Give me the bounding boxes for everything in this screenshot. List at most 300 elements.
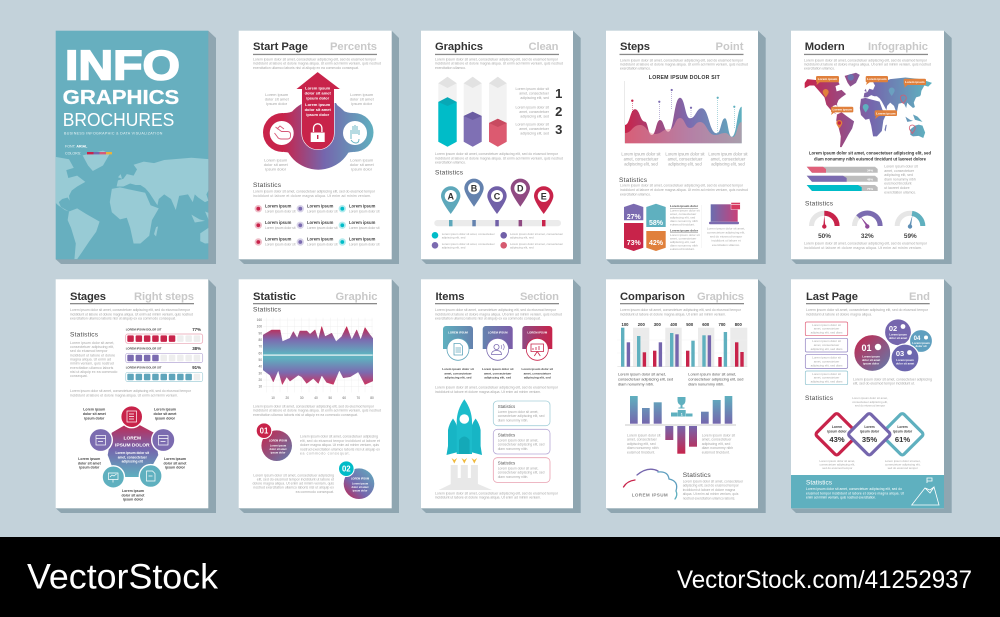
chart captions <box>618 372 743 386</box>
heading <box>620 291 744 304</box>
statistics text: exercitation ullamco laboris <box>70 366 114 370</box>
statistics text: incididunt ut labore et dolore magna aliqua. Ut enim ad minim veniam, quis nostrud <box>620 188 748 192</box>
panel: statistic page <box>239 279 399 513</box>
closing text: Lorem ipsum dolor sit amet, consectetuer adipiscing elit, sed do eiusmod tempor <box>804 242 928 246</box>
icon: trophy podium: 1 <box>681 412 683 416</box>
diamond captions: sed do eiusmod tempor <box>822 466 852 470</box>
closing text <box>435 492 559 500</box>
bold caption <box>809 150 931 161</box>
cloud logo: LOREM IPSUM <box>632 492 668 498</box>
icon: pointing hand <box>270 121 294 145</box>
intro text: Lorem ipsum dolor sit amet, consectetuer adipiscing elit, sed do eiusmod tempor <box>253 58 377 62</box>
intro text <box>804 58 931 71</box>
bars notes: Lorem ipsum dolor sit <box>884 164 918 168</box>
card: person speaking <box>483 326 513 360</box>
cover title: BROCHURES <box>63 109 174 130</box>
watermark url: VectorStock.com/41252937 <box>677 567 972 594</box>
progress bars: 77% <box>192 327 201 332</box>
location pins: E <box>541 191 547 201</box>
chart captions: consectetuer adipiscing elit, sed <box>688 376 743 382</box>
intro text: Lorem ipsum dolor sit amet, consectetuer adipiscing elit, sed do eiusmod tempor <box>620 58 744 62</box>
cover title: INFO <box>65 42 180 88</box>
intro text: incididunt ut labore et dolore magna aliqua. Ut enim ad minim veniam, quis nostrud <box>620 62 748 66</box>
mirrored area chart: 50 <box>258 358 262 362</box>
statistic dots grid: Lorem ipsum <box>307 220 334 225</box>
statistics heading: Statistics <box>435 170 464 176</box>
statistics text: minim veniam, quis nostrud <box>70 362 114 366</box>
legend: adipiscing elit, sed <box>510 246 534 250</box>
statistic dots grid: Lorem ipsum dolor sit <box>349 243 380 247</box>
card captions: Lorem ipsum dolor sit <box>482 367 513 371</box>
grouped bar chart: 500 <box>686 322 694 327</box>
statistic dots grid: Lorem ipsum dolor sit <box>307 209 338 213</box>
panel: items page <box>421 279 581 513</box>
statistics note: sed do eiusmod tempor <box>855 404 885 408</box>
statistics box 3: Statistics <box>498 461 516 466</box>
statistics text: nisi ut aliquip ex ea commodo <box>70 370 117 374</box>
percent hex blocks: 58% <box>649 220 664 227</box>
statistics text: Lorem ipsum dolor sit amet, <box>70 341 114 345</box>
statistic dots grid: Lorem ipsum <box>349 237 376 242</box>
statistic dots grid: Lorem ipsum dolor sit <box>265 243 296 247</box>
statistics box 3: consectetuer adipiscing elit, sed <box>498 471 545 475</box>
teal footer band: Lorem ipsum dolor sit amet, consectetuer adipiscing elit, sed do <box>806 487 902 491</box>
diverging text: amet, consectetuer <box>702 438 732 442</box>
outlined text boxes: amet, consectetuer <box>814 327 839 331</box>
statistics text: exercitation ullamco. <box>620 192 651 196</box>
bars notes: diam nonummy nibh <box>884 177 916 181</box>
chart caption: exercitation ullamco laboris nisi ut aliquip ex ea commodo consequat. <box>253 413 358 417</box>
mirrored area chart: 10 <box>271 396 275 400</box>
circle 02: 02 <box>342 465 351 474</box>
block notes: Lorem ipsum dolor <box>670 204 699 208</box>
side labels: Lorem ipsum <box>350 158 374 162</box>
mirrored area chart: 40 <box>314 396 318 400</box>
blob diagram <box>263 100 374 170</box>
diamond stats: ipsum dolor <box>893 430 913 434</box>
card: document <box>443 326 473 360</box>
legend: Lorem ipsum dolor sit amet, consectetuer <box>442 232 495 236</box>
map callouts: Lorem ipsum <box>867 77 887 81</box>
statistics text: magna aliqua. Ut enim ad <box>70 358 111 362</box>
heading: Infographic <box>868 41 928 53</box>
cover world map <box>56 150 208 259</box>
heading <box>804 41 928 55</box>
diverging text: euismod tincidunt. <box>627 450 655 454</box>
mirrored area chart: 60 <box>343 396 346 400</box>
diverging text: diam nonummy nibh <box>627 446 659 450</box>
circle 02 text <box>252 474 334 494</box>
bars notes: exercitation ullamco. <box>884 190 916 194</box>
diamond stats: Lorem <box>832 425 842 429</box>
numbered circles <box>854 319 932 372</box>
circles caption <box>853 378 932 386</box>
intro text <box>620 58 748 71</box>
legend: Lorem ipsum dolor sit amet, consectetuer <box>510 232 563 236</box>
icon: trophy podium <box>671 397 692 416</box>
chart captions: diam nonummy nibh. <box>688 381 724 386</box>
progress bars: 38% <box>192 346 201 351</box>
statistics heading: Statistics <box>253 182 282 189</box>
side labels: dolor sit amet <box>264 162 289 167</box>
diverging text: diam nonummy nibh <box>702 446 733 450</box>
stage labels: dolor sit amet <box>154 412 177 416</box>
card captions: amet, consectetuer <box>444 371 472 375</box>
mid text: Lorem ipsum dolor sit amet, consectetuer adipiscing elit, sed do eiusmod tempor <box>435 386 559 390</box>
3d bars: 48% <box>867 178 873 182</box>
icon: open hand <box>343 121 367 145</box>
grouped bar chart: 400 <box>670 322 678 327</box>
side labels: ipsum dolor <box>265 166 287 172</box>
stage labels: ipsum dolor <box>165 466 186 470</box>
circle 01 text <box>300 434 380 456</box>
statistic dots grid: Lorem ipsum dolor sit <box>265 226 296 230</box>
card captions: amet, consectetuer <box>484 371 512 375</box>
mirrored area chart: 70 <box>258 345 262 349</box>
diverging text: amet, consectetuer <box>627 438 658 442</box>
statistics text: Lorem ipsum dolor sit amet, consectetuer <box>683 480 744 484</box>
cloud logo <box>624 469 677 499</box>
statistics text: adipiscing elit, sed do eiusmod tempor <box>683 484 740 488</box>
circle 02 text: Lorem ipsum dolor sit amet, consectetuer adipiscing <box>253 474 334 478</box>
grouped bar chart: 800 <box>735 322 742 327</box>
location pins: A <box>447 191 454 201</box>
numbered circles: 02 <box>889 324 897 333</box>
numbered notes <box>516 86 562 137</box>
three captions: amet, consectetuer <box>624 156 659 162</box>
statistics text: consectetuer adipiscing elit, <box>70 345 114 349</box>
block notes <box>670 204 700 251</box>
block notes: Lorem ipsum dolor sit <box>670 233 700 237</box>
world map <box>805 73 932 147</box>
card: presentation <box>522 326 552 360</box>
statistics text <box>253 190 376 198</box>
statistic dots grid: Lorem ipsum <box>265 204 292 208</box>
intro text: exercitation ullamco laboris nisi ut aliquip ex ea commodo consequat. <box>435 317 541 321</box>
intro text <box>806 308 929 316</box>
heading: Statistic <box>253 291 296 303</box>
cover title: GRAPHICS <box>63 86 179 109</box>
cover title <box>63 42 180 130</box>
outlined text boxes: amet, consectetuer <box>814 359 839 363</box>
intro text: exercitation ullamco. <box>620 67 651 71</box>
statistic dots grid: Lorem ipsum <box>349 204 376 208</box>
statistics heading: Statistics <box>619 177 648 184</box>
heading <box>253 41 377 55</box>
grouped bar chart: 700 <box>718 322 726 327</box>
circle 01: dolor sit amet <box>269 447 287 451</box>
outlined text boxes: adipiscing elit, sed diam <box>811 380 843 384</box>
heading: Clean <box>528 41 559 53</box>
numbered circles: dolor sit amet <box>862 358 880 362</box>
laptop caption: Lorem ipsum dolor sit amet, <box>707 226 745 230</box>
block notes: amet, consectetuer <box>670 212 696 216</box>
progress bars: 91% <box>192 365 201 370</box>
numbered circles: ipsum dolor <box>863 362 880 366</box>
pentagon diagram: LOREM <box>123 436 141 442</box>
intro text: exercitation ullamco. <box>804 67 835 71</box>
statistics heading: Statistics <box>805 200 834 208</box>
card captions: adipiscing elit, sed <box>445 376 472 380</box>
statistics note: Lorem ipsum dolor sit amet, <box>852 396 888 400</box>
diverging bars <box>625 396 736 454</box>
circle 02 <box>338 461 374 499</box>
diverging text: euismod tincidunt. <box>702 450 730 454</box>
stage labels: Lorem ipsum <box>83 408 105 412</box>
three captions <box>621 152 748 166</box>
intro text: exercitation ullamco laboris nisi ut aliquip ex ea commodo consequat. <box>253 66 359 70</box>
statistics text: consequat. <box>70 374 88 378</box>
heading <box>806 291 930 304</box>
diverging text: adipiscing elit, sed <box>627 442 656 446</box>
block notes: Lorem ipsum dolor <box>670 228 699 232</box>
pentagon diagram <box>89 406 175 488</box>
numbered notes: adipiscing elit, sed <box>520 96 549 100</box>
percent hex blocks <box>624 204 666 251</box>
statistics note: consectetuer adipiscing elit, <box>852 400 888 404</box>
gauge percentages: 32% <box>861 233 874 240</box>
diverging text: Lorem ipsum dolor sit <box>627 434 660 438</box>
circles caption: Lorem ipsum dolor sit amet, consectetuer adipiscing <box>853 378 932 382</box>
percent hex blocks: 42% <box>649 240 664 247</box>
card: document: LOREM IPSUM <box>448 330 469 334</box>
mirrored area chart: 160 <box>257 318 262 322</box>
diamond stats <box>815 413 924 456</box>
gauge percentages <box>818 233 917 240</box>
heading: Start Page <box>253 41 308 53</box>
card captions: amet, consectetuer <box>524 371 552 375</box>
bold caption: diam nonummy nibh euismod tincidunt ut laoreet dolore <box>814 156 927 161</box>
heading: Right steps <box>134 291 194 303</box>
mid text: incididunt ut labore et dolore magna aliqua. Ut enim ad minim veniam. <box>435 390 541 394</box>
statistic dots grid: Lorem ipsum <box>265 237 292 242</box>
statistic dots grid: Lorem ipsum <box>307 237 334 242</box>
circle 01: 01 <box>260 427 269 436</box>
diamond captions: Lorem ipsum dolor sit amet, <box>885 459 921 463</box>
circle 02 text: ea commodo consequat. <box>296 490 334 494</box>
pentagon diagram: amet, consectetuer <box>118 455 148 459</box>
statistics text: incididunt ut labore et dolore magna <box>683 488 735 492</box>
laptop caption <box>707 226 745 247</box>
block notes: Lorem ipsum dolor sit <box>670 208 700 212</box>
outlined text boxes: amet, consectetuer <box>814 343 839 347</box>
side labels: Lorem ipsum <box>265 92 289 97</box>
intro text: incididunt ut labore et dolore magna aliqua. Ut enim ad minim veniam, quis nostrud <box>804 62 931 66</box>
outlined text boxes <box>805 322 848 385</box>
location pins: B <box>471 184 478 194</box>
stage circles <box>89 406 175 488</box>
map pins <box>823 74 915 134</box>
intro text: Lorem ipsum dolor sit amet, consectetuer adipiscing elit, sed do eiusmod tempor <box>70 308 191 312</box>
circle 01: Lorem ipsum <box>270 444 287 448</box>
teal footer band: eiusmod tempor incididunt ut labore et dolore magna aliqua. Ut <box>806 491 904 495</box>
mirrored area chart: 60 <box>258 351 262 355</box>
teal footer band: enim ad minim veniam, quis nostrud exercitation. <box>806 496 876 500</box>
panel: graphics page <box>421 31 581 264</box>
diamond captions: sed do eiusmod tempor <box>888 466 918 470</box>
heading <box>435 41 559 55</box>
progress bars: LOREM IPSUM DOLOR SIT <box>126 366 162 370</box>
heading: Point <box>716 41 744 53</box>
mirrored area chart: 100 <box>257 325 262 329</box>
statistics text: aliqua. Ut enim ad minim veniam, quis <box>683 492 739 496</box>
heading: End <box>909 291 930 303</box>
circle 02: dolor sit amet <box>351 485 369 489</box>
laptop caption: sed do eiusmod tempor <box>710 234 742 238</box>
statistics box 1 <box>493 401 550 426</box>
side labels: ipsum dolor <box>351 166 373 172</box>
heading: Steps <box>620 41 650 53</box>
heading: Comparison <box>620 291 685 303</box>
outlined text boxes: Lorem ipsum dolor sit <box>812 356 841 360</box>
location pins <box>441 179 553 214</box>
heading: Section <box>520 291 559 303</box>
three captions: adipiscing elit, sed <box>668 162 702 166</box>
heading: Graphics <box>697 291 744 303</box>
stage labels: ipsum dolor <box>155 416 176 420</box>
statistic dots grid: Lorem ipsum dolor sit <box>307 226 338 230</box>
legend: adipiscing elit, sed <box>442 246 466 250</box>
chart captions: Lorem ipsum dolor sit amet, <box>688 372 736 376</box>
stage labels: ipsum dolor <box>84 416 105 420</box>
panel: stages page <box>56 279 216 513</box>
map callouts: Lorem ipsum <box>876 111 896 115</box>
grouped bar chart: 200 <box>638 322 645 327</box>
mirrored area chart: 30 <box>258 371 262 375</box>
area chart <box>624 75 742 143</box>
statistics heading: Statistics <box>70 332 99 338</box>
location pins: D <box>517 184 524 194</box>
block notes: adipiscing elit, sed <box>670 240 696 244</box>
up arrow <box>296 72 341 150</box>
card captions: adipiscing elit, sed <box>524 376 551 380</box>
stage labels: dolor sit amet <box>122 493 145 497</box>
laptop caption: incididunt ut labore et <box>711 238 741 242</box>
diamond captions <box>819 459 921 470</box>
cover colour swatches <box>65 152 112 156</box>
side labels: dolor sit amet <box>350 162 375 167</box>
three captions: amet, consectetuer <box>711 156 746 162</box>
gauge percentages: 59% <box>904 233 917 240</box>
heading: Graphic <box>336 291 378 303</box>
statistic dots grid <box>255 204 380 247</box>
block notes: diam nonummy nibh <box>670 219 698 223</box>
laptop caption: exercitation ullamco. <box>712 243 740 247</box>
icon: padlock <box>311 124 325 142</box>
numbered notes: amet, consectetuer <box>519 110 550 114</box>
intro text: Lorem ipsum dolor sit amet, consectetuer adipiscing elit, sed do eiusmod tempor <box>804 58 928 62</box>
mirrored area chart: 80 <box>258 338 262 342</box>
pentagon diagram: Lorem ipsum dolor sit <box>116 451 150 455</box>
closing text: Lorem ipsum dolor sit amet, consectetuer adipiscing elit, sed do eiusmod tempor <box>435 492 559 496</box>
footer bar <box>0 537 1000 617</box>
mid text: incididunt ut labore et dolore magna aliqua. Ut enim ad minim veniam. <box>70 393 178 397</box>
mirrored area chart: 20 <box>286 396 289 400</box>
heading <box>435 291 559 304</box>
panel: cover page <box>56 30 216 264</box>
chart captions: consectetuer adipiscing elit, sed <box>618 376 673 382</box>
statistics note <box>852 396 888 408</box>
progress bars: LOREM IPSUM DOLOR SIT <box>126 346 162 350</box>
statistics heading: Statistics <box>683 472 711 479</box>
statistics box 2 <box>493 429 550 454</box>
mid text: exercitation ullamco. <box>435 160 466 164</box>
3d column chart <box>438 77 507 147</box>
statistics heading: Statistics <box>805 395 834 402</box>
grouped bar chart: 300 <box>654 322 661 327</box>
cover colour swatches: COLORS: <box>65 152 81 156</box>
bars notes: amet, consectetuer <box>884 169 915 173</box>
card captions <box>442 367 553 380</box>
block notes: euismod tincidunt. <box>670 222 695 226</box>
numbered circles: dolor sit amet <box>889 336 907 340</box>
intro text <box>620 308 742 316</box>
block notes: amet, consectetuer <box>670 236 696 240</box>
heading: Stages <box>70 291 106 303</box>
statistics text: incididunt ut labore et dolore magna aliqua. Ut enim ad minim veniam. <box>253 194 371 198</box>
diamond stats: 43% <box>829 435 845 444</box>
statistics box 2: Statistics <box>498 432 516 437</box>
numbered notes: 2 <box>555 104 562 119</box>
outlined text boxes: adipiscing elit, sed diam <box>811 347 843 351</box>
heading <box>70 291 194 304</box>
diamond stats: ipsum dolor <box>827 430 847 434</box>
mid text: Lorem ipsum dolor sit amet, consectetuer adipiscing elit, sed do eiusmod tempor <box>70 389 192 393</box>
statistics box 2: consectetuer adipiscing elit, sed <box>498 442 545 446</box>
map callouts: Lorem ipsum <box>818 77 837 81</box>
diverging text <box>627 434 735 454</box>
intro text: incididunt ut labore et dolore magna aliqua. <box>806 312 872 316</box>
heading: Graphics <box>435 41 483 53</box>
numbered notes: amet, consectetuer <box>519 92 550 96</box>
up arrow: ipsum dolor <box>306 112 330 117</box>
stage labels: dolor sit amet <box>78 461 102 465</box>
intro text: Lorem ipsum dolor sit amet, consectetuer adipiscing elit, sed do eiusmod tempor <box>435 58 559 62</box>
panel: steps page <box>606 31 766 264</box>
chart caption: Lorem ipsum dolor sit amet, consectetuer adipiscing elit, sed do eiusmod tempor <box>253 404 375 408</box>
side labels <box>264 92 375 172</box>
card: person speaking: LOREM IPSUM <box>488 330 508 334</box>
numbered notes: 3 <box>555 122 562 137</box>
diamond stats: Lorem <box>897 425 908 429</box>
numbered notes: 1 <box>555 86 562 101</box>
circle 02: Lorem ipsum <box>352 482 369 486</box>
three captions: Lorem ipsum dolor sit <box>708 152 748 156</box>
mid text: incididunt ut labore et dolore magna aliqua. Ut enim ad minim veniam, quis nostrud <box>435 156 563 160</box>
progress bars <box>126 327 203 382</box>
numbered circles: 01 <box>861 343 872 353</box>
percent hex blocks: 27% <box>627 214 641 221</box>
circle 01: LOREM IPSUM <box>269 438 287 442</box>
side labels: ipsum dolor <box>266 101 288 106</box>
intro text <box>70 308 193 321</box>
intro text: incididunt ut labore et dolore magna aliqua. Ut enim ad minim veniam, quis nostrud <box>70 312 193 316</box>
legend <box>432 232 563 250</box>
map callouts: Lorem ipsum <box>832 108 852 112</box>
stage labels: dolor sit amet <box>164 461 187 465</box>
chart captions: diam nonummy nibh. <box>618 381 654 386</box>
heading: Items <box>436 291 464 303</box>
mid text: Lorem ipsum dolor sit amet, consectetuer adipiscing elit, sed do eiusmod tempor <box>435 152 559 156</box>
diamond stats: ipsum dolor <box>860 430 880 434</box>
up arrow: ipsum dolor <box>306 96 330 100</box>
numbered notes: Lorem ipsum dolor sit <box>516 87 549 91</box>
location pins: C <box>494 191 501 201</box>
cover font note: FONT: ARIAL <box>65 144 88 148</box>
legend: Lorem ipsum dolor sit amet, consectetuer <box>442 242 495 246</box>
numbered circles: 04 <box>914 336 921 342</box>
statistics box 1: Lorem ipsum dolor sit amet, <box>498 410 538 414</box>
